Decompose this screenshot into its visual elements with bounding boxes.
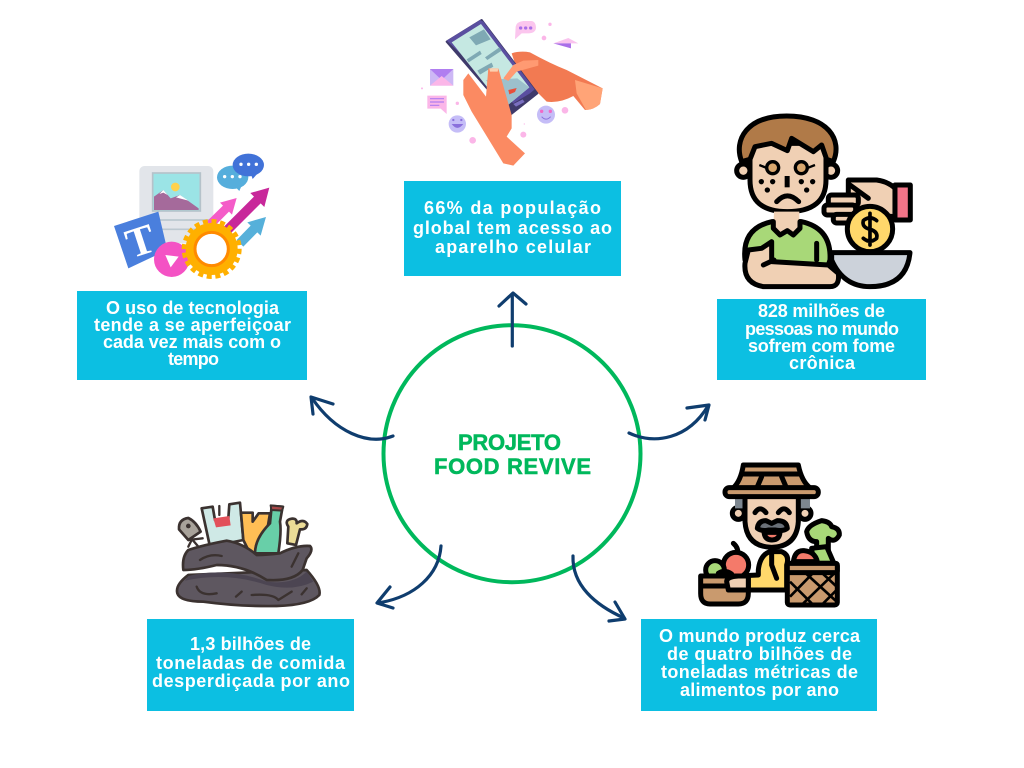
panel: wasted food [147,619,354,711]
panel: 66% population: 66% da população [424,198,601,218]
panel: world food production: toneladas métricas de [661,662,858,682]
icon: technology document, gear and arrows [114,154,269,277]
panel: wasted food: desperdiçada por ano [152,671,350,691]
panel: world food production: de quatro bilhões de [667,644,852,664]
panel: 66% population: aparelho celular [435,237,591,257]
arrow: upper left [311,397,393,439]
icon: hands holding phone [421,20,603,166]
panel: chronic hunger [717,299,926,380]
panel: chronic hunger: pessoas no mundo [745,319,899,339]
panel: technology improves: O uso de tecnologia [106,298,280,318]
central circle with title [384,325,640,582]
panel: wasted food: 1,3 bilhões de [190,634,311,654]
panel: wasted food: toneladas de comida [156,653,346,673]
central circle with title: PROJETO [458,430,561,455]
icon: farmer with baskets [701,465,839,605]
panel: chronic hunger: sofrem com fome [748,336,895,356]
panel: world food production: O mundo produz cerca [659,626,861,646]
icon: technology document, gear and arrows: T [120,216,161,268]
panel: technology improves: tempo [168,349,219,369]
panel: chronic hunger: crônica [789,353,856,373]
panel: technology improves: cada vez mais com o [103,332,281,352]
panel: technology improves [77,291,307,380]
central circle with title: FOOD REVIVE [434,454,591,479]
arrow: up [499,293,526,346]
panel: 66% population [404,181,621,276]
panel: world food production [641,619,877,711]
arrow: upper right [629,405,709,439]
icon: garbage bag with waste [177,503,320,606]
arrow: lower left [377,546,441,608]
icon: hungry boy receiving a coin [737,116,910,287]
panel: world food production: alimentos por ano [680,680,839,700]
panel: technology improves: tende a se aperfeiçoar [94,315,291,335]
panel: chronic hunger: 828 milhões de [758,301,885,321]
arrow: lower right [573,556,625,621]
panel: 66% population: global tem acesso ao [413,218,612,238]
